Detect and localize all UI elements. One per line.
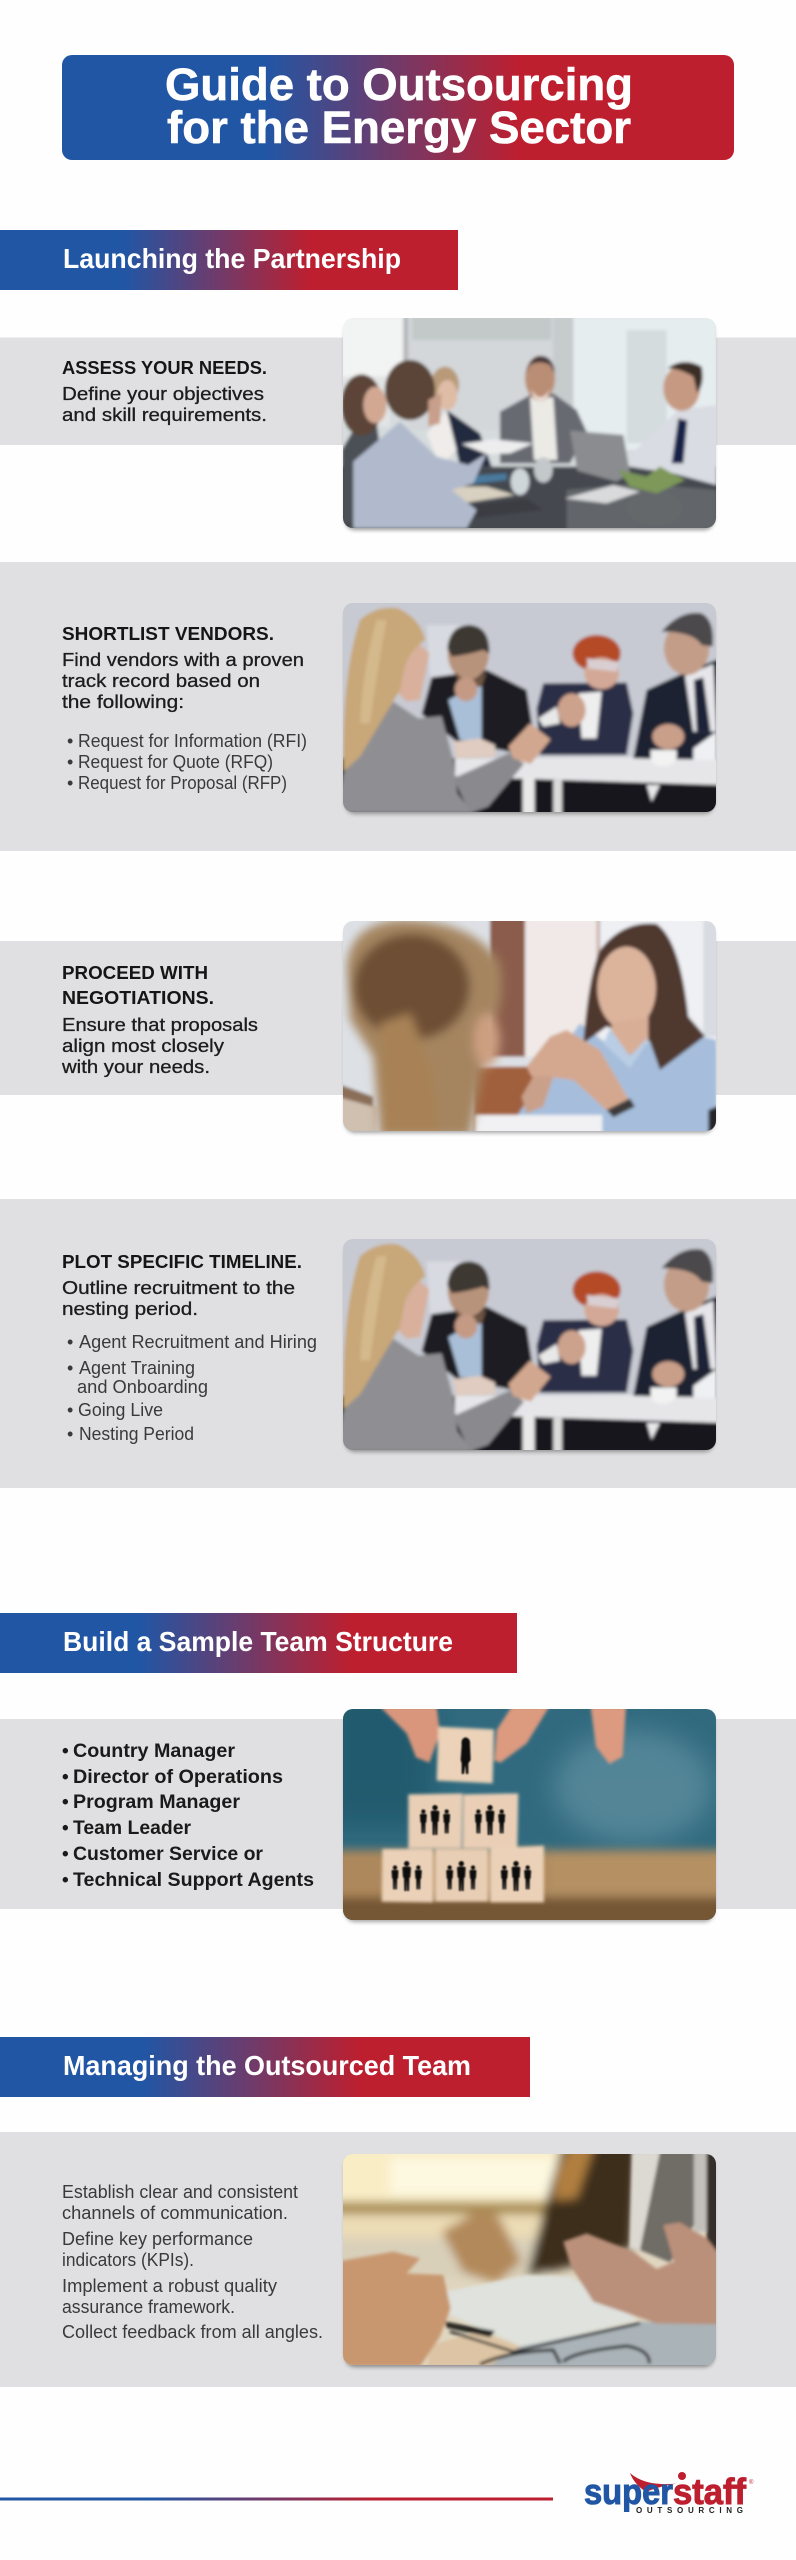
list: timeline stages: • [67, 1424, 73, 1444]
text: management practices: Implement a robust quality [62, 2276, 277, 2296]
text: shortlist vendors: SHORTLIST VENDORS. [62, 623, 274, 644]
text: plot specific timeline: Outline recruitment to the [62, 1277, 295, 1298]
list: timeline stages: • [67, 1358, 73, 1378]
list: team roles: • [62, 1844, 69, 1865]
footer line [0, 2498, 553, 2500]
text: shortlist vendors: track record based on [62, 670, 260, 691]
list: request types: • [67, 731, 73, 751]
section heading: Managing the Outsourced Team [0, 2037, 530, 2097]
list: timeline stages: Agent Training [79, 1358, 195, 1378]
section heading: Build a Sample Team Structure: Build a Sample Team Structure [63, 1626, 453, 1657]
text: proceed with negotiations: align most closely [62, 1035, 225, 1056]
text: proceed with negotiations [61, 962, 258, 1077]
photo: business team meeting around a glass table [342, 318, 717, 533]
panel: assess your needs [0, 318, 796, 533]
text: management practices: channels of communication. [62, 2203, 288, 2223]
list: timeline stages: Going Live [78, 1400, 163, 1420]
text: management practices: indicators (KPIs). [62, 2250, 194, 2270]
photo: candidate facing three interviewers [342, 603, 716, 816]
section heading: Managing the Outsourced Team: Managing the Outsourced Team [63, 2050, 471, 2081]
section heading: Build a Sample Team Structure [0, 1613, 517, 1673]
section heading: Launching the Partnership: Launching the Partnership [63, 243, 401, 274]
text: shortlist vendors: the following: [62, 691, 184, 712]
list: request types: Request for Information (RFI) [78, 731, 307, 751]
text: assess your needs [62, 357, 267, 425]
list: team roles: Program Manager [73, 1792, 241, 1813]
logo wordmark [584, 2471, 754, 2512]
text: proceed with negotiations: with your needs. [61, 1056, 210, 1077]
list: request types: • [67, 752, 73, 772]
logo swoosh [630, 2473, 688, 2492]
list: team roles: • [62, 1818, 69, 1839]
text: proceed with negotiations: PROCEED WITH [62, 962, 208, 983]
text: assess your needs: ASSESS YOUR NEEDS. [62, 357, 267, 378]
text: assess your needs: and skill requirements. [62, 404, 267, 425]
title: Guide to Outsourcing [165, 59, 633, 110]
text: management practices: assurance framework. [62, 2297, 235, 2317]
list: team roles: Country Manager [73, 1741, 236, 1762]
panel: plot specific timeline [0, 1199, 796, 1488]
list: team roles: • [62, 1870, 69, 1891]
text: plot specific timeline: PLOT SPECIFIC TIMELINE. [62, 1251, 302, 1272]
list: team roles: Technical Support Agents [73, 1870, 314, 1891]
photo: candidate facing three interviewers, repeated [342, 1239, 716, 1454]
list: team roles: • [62, 1792, 69, 1813]
list: request types: Request for Quote (RFQ) [78, 752, 273, 772]
logo dot [678, 2472, 686, 2480]
text: shortlist vendors [62, 623, 304, 712]
list: team roles: Director of Operations [73, 1767, 283, 1788]
text: proceed with negotiations: NEGOTIATIONS. [62, 987, 214, 1008]
text: management practices: Define key performance [62, 2229, 253, 2249]
text: plot specific timeline [62, 1251, 302, 1319]
list: request types: • [67, 773, 73, 793]
text: shortlist vendors: Find vendors with a proven [62, 649, 304, 670]
title: for the Energy Sector [167, 102, 631, 153]
list: team roles: • [62, 1767, 69, 1788]
list: timeline stages: Agent Recruitment and Hiring [79, 1332, 317, 1352]
list: request types: Request for Proposal (RFP) [78, 773, 287, 793]
list: timeline stages: • [67, 1332, 73, 1352]
list: timeline stages: and Onboarding [77, 1377, 208, 1397]
list: team roles: Customer Service or [73, 1844, 264, 1865]
logo tagline: OUTSOURCING [636, 2506, 743, 2515]
title [62, 55, 734, 160]
section heading: Launching the Partnership [0, 230, 458, 290]
text: assess your needs: Define your objectives [62, 383, 264, 404]
text: management practices: Establish clear and consistent [62, 2182, 298, 2202]
list: timeline stages: Nesting Period [79, 1424, 194, 1444]
list: team roles: Team Leader [73, 1818, 192, 1839]
list: timeline stages: • [67, 1400, 73, 1420]
text: proceed with negotiations: Ensure that proposals [62, 1014, 258, 1035]
photo: two people's hands in discussion over documents [342, 2154, 717, 2370]
panel: sample team structure [0, 1709, 796, 1924]
photo: hand stacking wooden blocks with people icons [342, 1709, 716, 1924]
list: team roles: • [62, 1741, 69, 1762]
list: request types [67, 731, 307, 793]
list: team roles [62, 1741, 314, 1891]
logo wordmark: ® [749, 2479, 754, 2486]
photo: woman talking across table [342, 921, 716, 1136]
logo wordmark: super [584, 2471, 673, 2512]
text: management practices [62, 2182, 323, 2342]
text: plot specific timeline: nesting period. [62, 1298, 198, 1319]
panel: shortlist vendors [0, 562, 796, 851]
list: timeline stages [67, 1332, 317, 1444]
text: management practices: Collect feedback from all angles. [62, 2322, 323, 2342]
logo wordmark: staff [673, 2471, 747, 2512]
panel: managing the outsourced team [0, 2132, 796, 2387]
logo: superstaff outsourcing [584, 2471, 754, 2515]
panel: proceed with negotiations [0, 921, 796, 1136]
